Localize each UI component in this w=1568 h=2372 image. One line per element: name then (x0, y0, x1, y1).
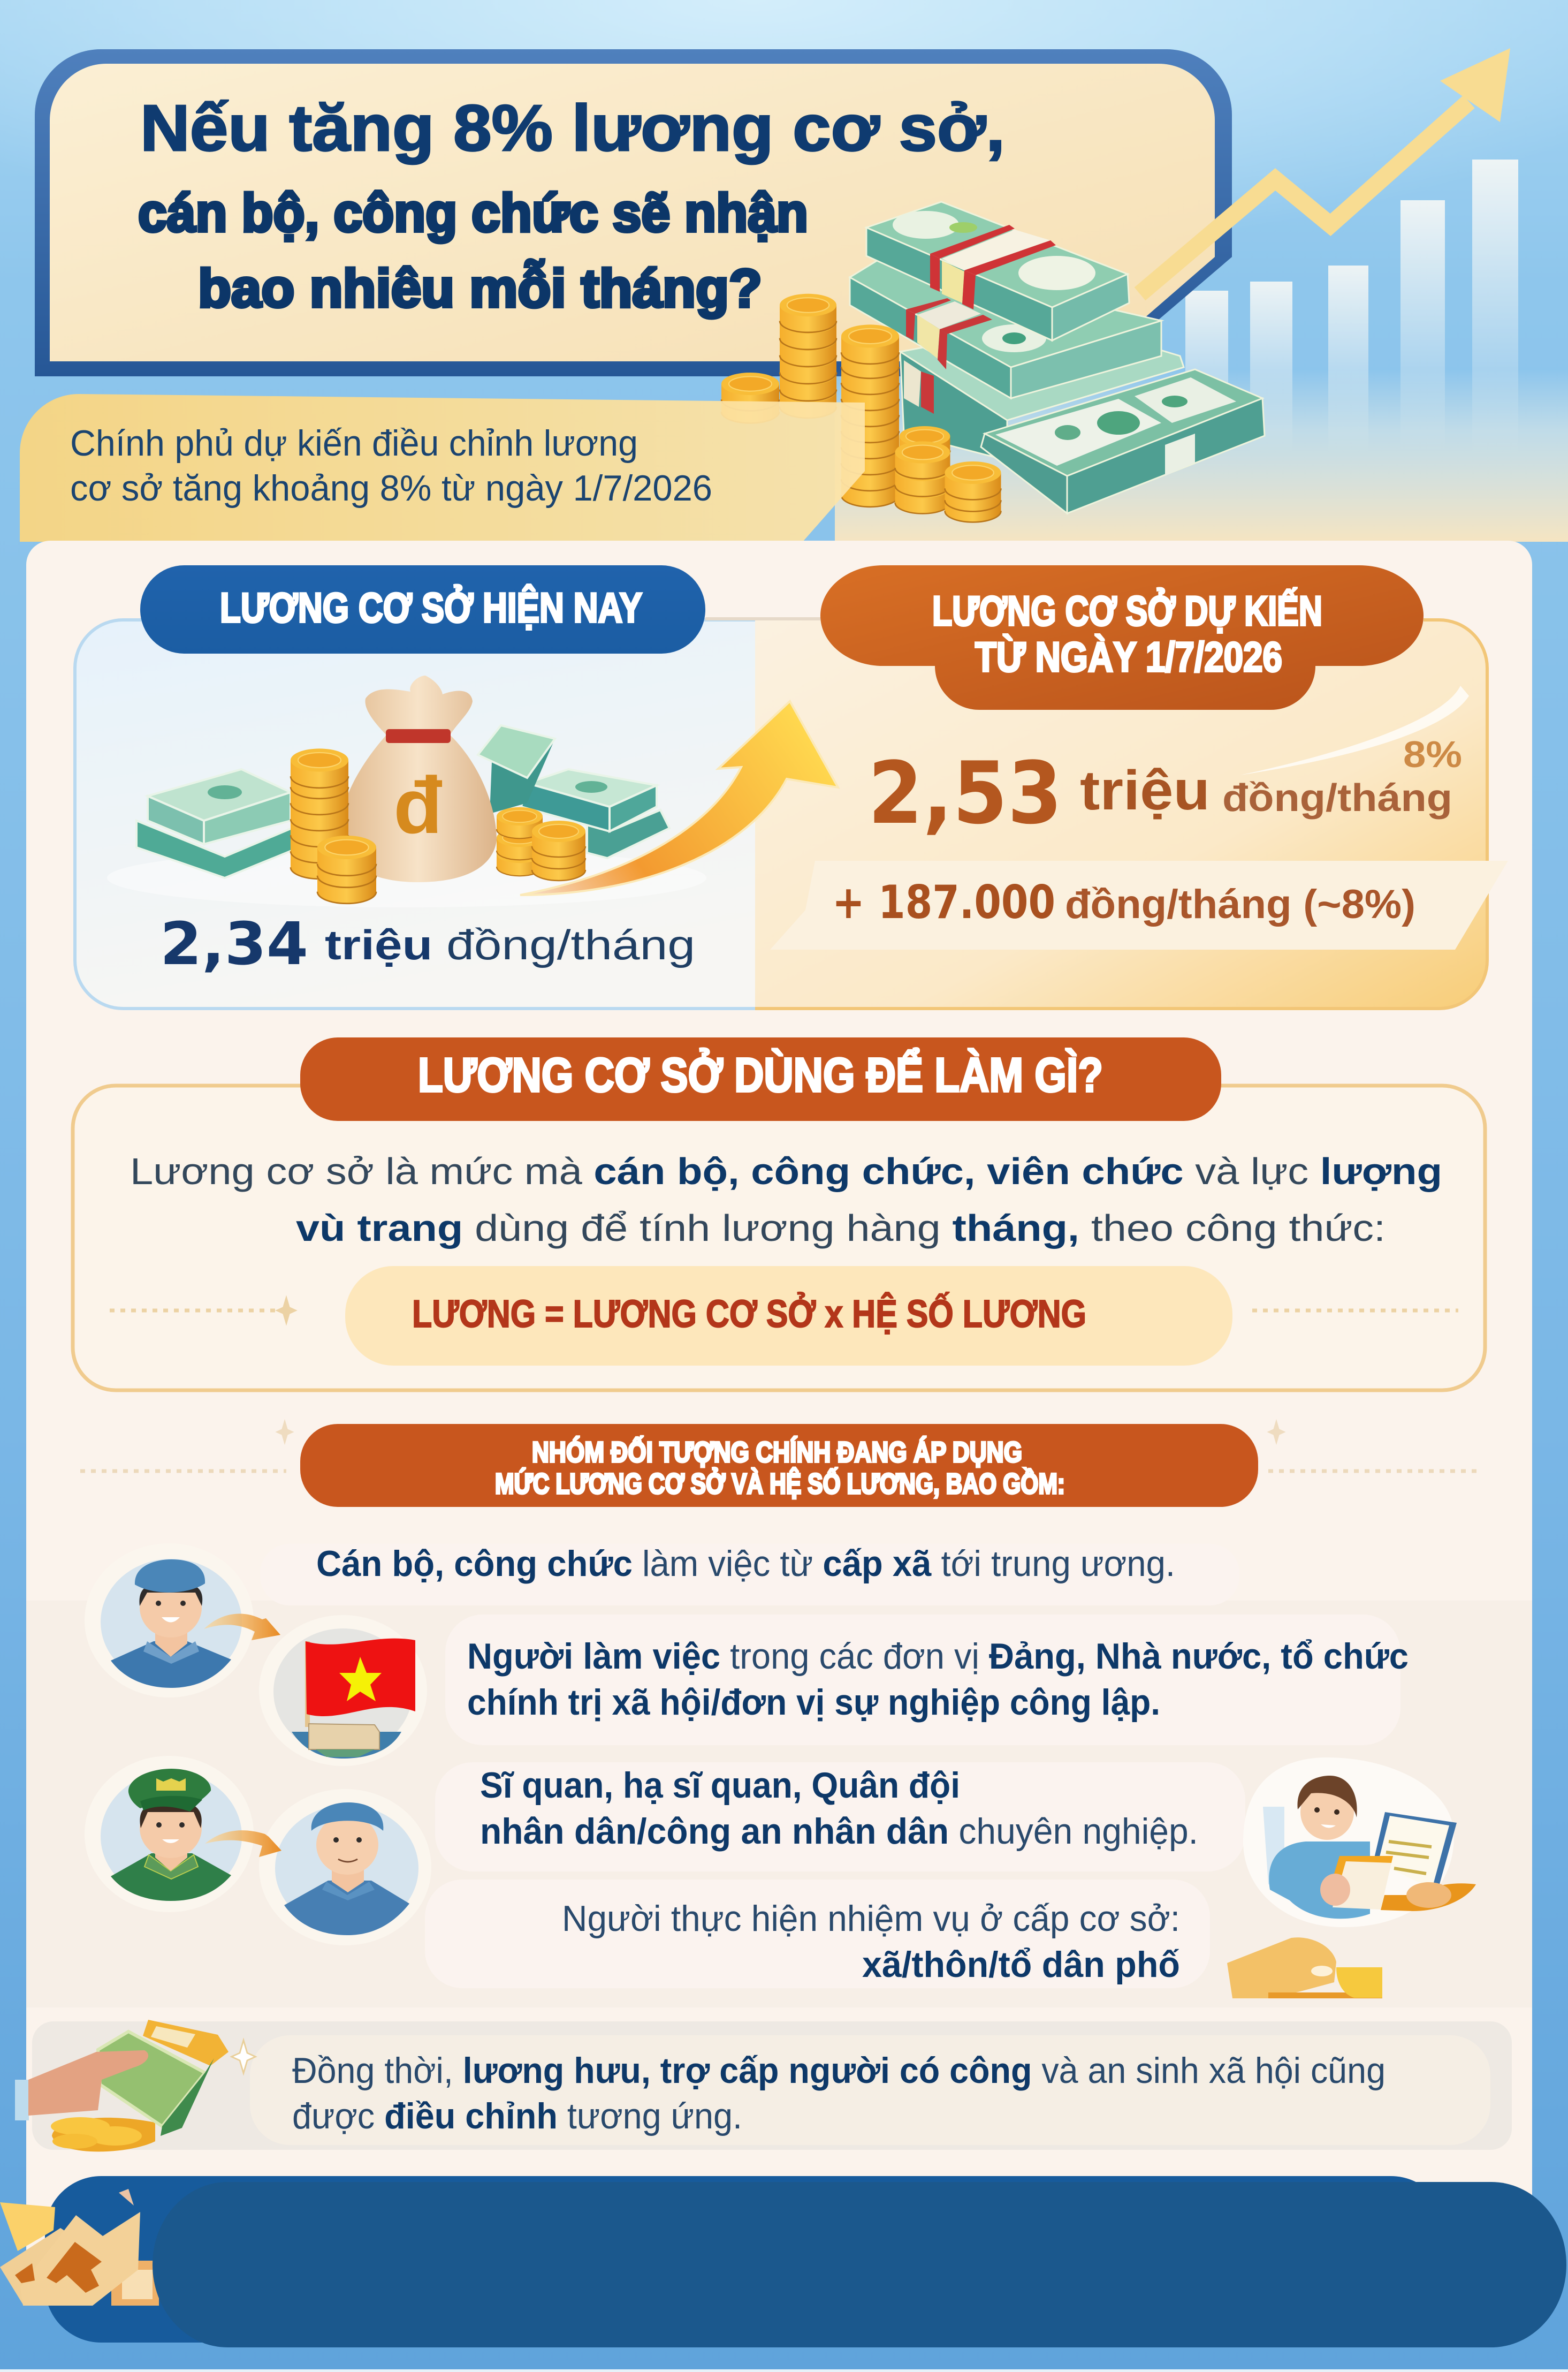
list item 3: nhân dân/công an nhân dân chuyên nghiệp. (480, 1811, 1198, 1852)
textured backdrop for list (26, 1601, 1532, 2007)
icon: cash stacks (136, 725, 669, 878)
ribbon: increase amount: đồng/tháng (~8%) (1065, 882, 1415, 927)
icon: money stacks (850, 202, 1265, 513)
formula (345, 1266, 1232, 1366)
bag body (339, 676, 497, 882)
icon: soldier portrait (85, 1756, 254, 1912)
panel: projected salary (705, 565, 1487, 1009)
list item 2: chính trị xã hội/đơn vị sự nghiệp công lập. (467, 1682, 1160, 1723)
note panel (32, 2021, 1512, 2150)
list item 2 (445, 1615, 1409, 1745)
icon: money bag with cash and coins (107, 676, 706, 907)
heading: applicable groups: NHÓM ĐỐI TƯỢNG CHÍNH ĐANG ÁP DỤNG (532, 1436, 1022, 1468)
heading: applicable groups (80, 1419, 1477, 1507)
title (138, 92, 1005, 319)
explanation text: Lương cơ sở là mức mà cán bộ, công chức, viên chức và lực lượng (130, 1150, 1442, 1192)
list item 3 (435, 1762, 1245, 1871)
icon: coin stacks (721, 294, 1001, 522)
ribbon: increase amount (770, 861, 1508, 950)
icon: person with documents (1243, 1757, 1476, 1927)
icon: price tags (0, 2189, 159, 2306)
arrow: officer to flag (204, 1614, 280, 1640)
title: bao nhiêu mỗi tháng? (198, 259, 762, 319)
panel: subtitle (20, 394, 865, 542)
footer dark back panel (45, 2176, 1447, 2343)
heading: LƯƠNG CƠ SỞ DÙNG ĐỂ LÀM GÌ? (418, 1048, 1103, 1102)
arrow: soldier to worker (205, 1830, 281, 1857)
footer blue banner (153, 2182, 1566, 2347)
panel: subtitle: cơ sở tăng khoảng 8% từ ngày 1/7/2026 (70, 468, 712, 509)
list item 2: Người làm việc trong các đơn vị Đảng, Nhà nước, tổ chức (467, 1636, 1409, 1677)
list item 1: Cán bộ, công chức làm việc từ cấp xã tới trung ương. (316, 1543, 1175, 1584)
list item 4: Người thực hiện nhiệm vụ ở cấp cơ sở: (562, 1898, 1180, 1939)
panel: subtitle: Chính phủ dự kiến điều chỉnh lương (70, 423, 638, 464)
chart bars background (1185, 160, 1518, 454)
title: cán bộ, công chức sẽ nhận (138, 183, 808, 243)
bag currency sign: đ (393, 760, 443, 850)
list item 4 (425, 1880, 1210, 1988)
icon: hand holding money (15, 2020, 255, 2151)
current salary value: triệu đồng/tháng (325, 921, 695, 968)
arrow: increase (520, 701, 838, 895)
note panel: được điều chỉnh tương ứng. (292, 2096, 742, 2136)
icon: flag (259, 1615, 427, 1766)
current salary value (160, 910, 695, 978)
icon: rising arrow (1140, 48, 1510, 294)
list item 1 (260, 1543, 1239, 1605)
projected salary value: đồng/tháng (1222, 777, 1452, 820)
icon: worker portrait (259, 1789, 431, 1945)
heading: current salary: LƯƠNG CƠ SỞ HIỆN NAY (220, 584, 642, 631)
explanation text (130, 1150, 1442, 1249)
panel: main content (26, 541, 1532, 2280)
projected salary value: 8% (1403, 733, 1462, 775)
heading: applicable groups: MỨC LƯƠNG CƠ SỞ VÀ HỆ SỐ LƯƠNG, BAO GỒM: (495, 1467, 1065, 1500)
heading: projected salary: LƯƠNG CƠ SỞ DỰ KIẾN (932, 587, 1322, 634)
backdrop band behind money (835, 369, 1568, 542)
icon: officer portrait (85, 1543, 254, 1697)
panel: what base salary is for (73, 1037, 1485, 1390)
list item 4: xã/thôn/tổ dân phố (862, 1944, 1180, 1985)
heading: projected salary (932, 587, 1322, 680)
projected salary value (868, 733, 1462, 843)
icon: hand with coin cup (1227, 1937, 1382, 1998)
title: Nếu tăng 8% lương cơ sở, (140, 92, 1005, 164)
projected salary value: 2,53 (868, 743, 1062, 843)
current salary value: 2,34 (160, 910, 308, 978)
ribbon: increase amount: + 187.000 (832, 876, 1055, 929)
panel: current salary (75, 565, 755, 1009)
formula: LƯƠNG = LƯƠNG CƠ SỞ x HỆ SỐ LƯƠNG (412, 1292, 1086, 1336)
note panel: Đồng thời, lương hưu, trợ cấp người có công và an sinh xã hội cũng (292, 2050, 1386, 2091)
explanation text: vù trang dùng để tính lương hàng tháng, theo công thức: (296, 1207, 1386, 1249)
heading: projected salary: TỪ NGÀY 1/7/2026 (975, 633, 1282, 680)
coins around bag (291, 748, 585, 904)
title panel (35, 49, 1232, 376)
list item 3: Sĩ quan, hạ sĩ quan, Quân đội (480, 1765, 960, 1806)
projected salary value: triệu (1080, 760, 1210, 822)
